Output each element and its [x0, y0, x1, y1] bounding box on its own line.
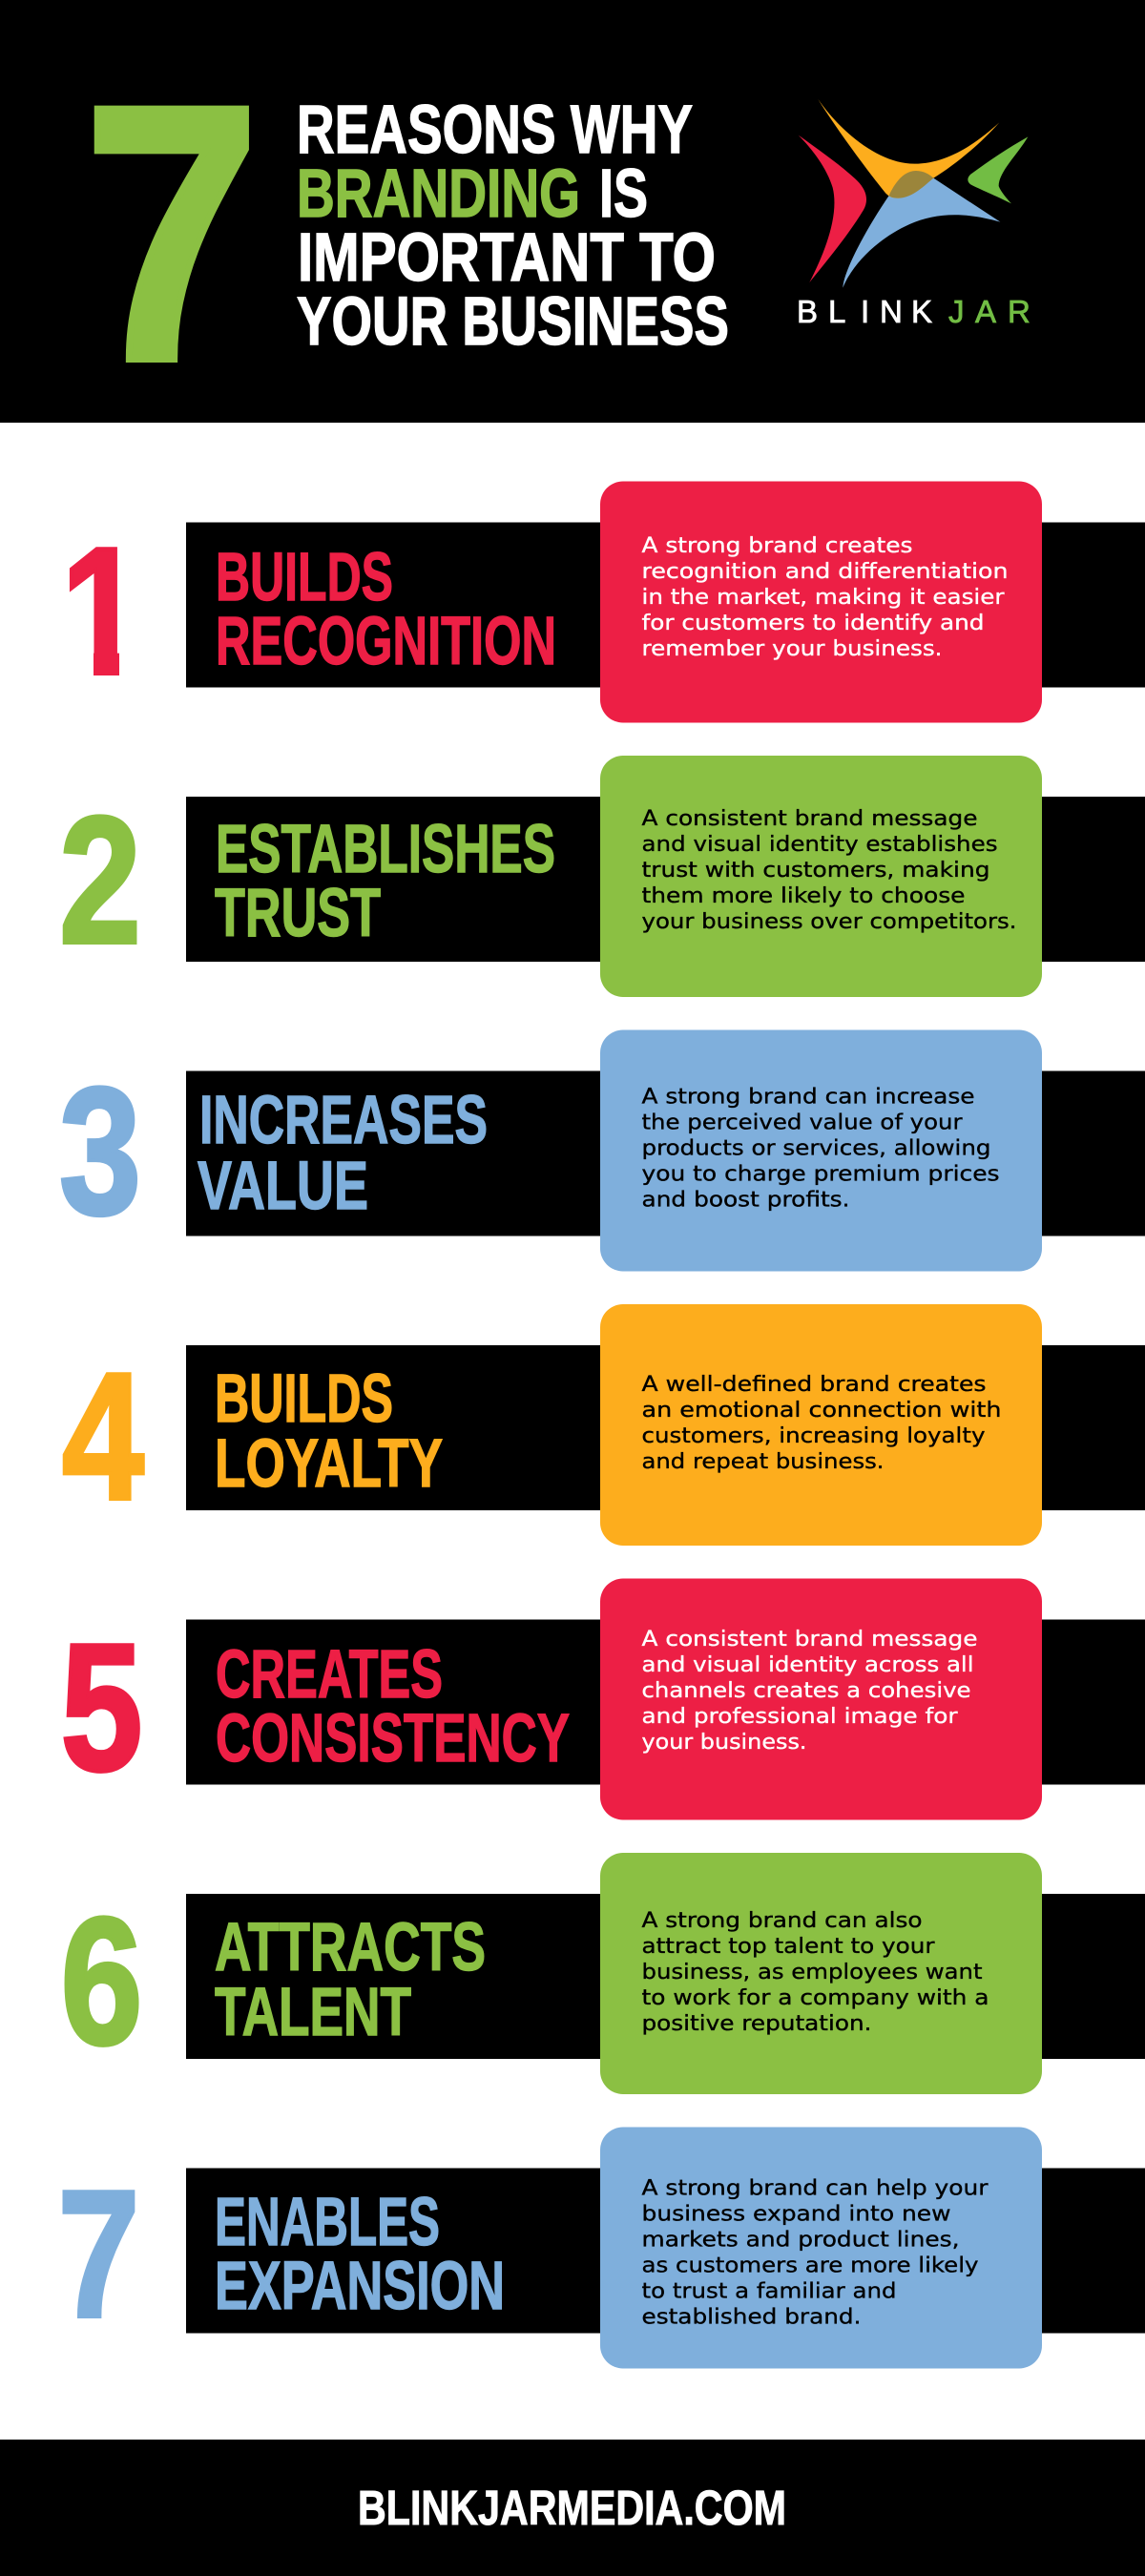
black bar	[186, 1070, 1145, 1236]
card text: trust with customers, making	[641, 859, 990, 883]
card	[600, 1578, 1042, 1820]
card text: A strong brand can help your	[641, 2177, 989, 2200]
row 5: creates consistency	[61, 1578, 1145, 1820]
card text: remember your business.	[641, 637, 943, 661]
card text: A strong brand can also	[641, 1909, 922, 1933]
black bar	[186, 1620, 1145, 1784]
heading	[215, 1361, 443, 1502]
heading: CREATES	[216, 1637, 443, 1713]
card text: an emotional connection with	[641, 1399, 1002, 1423]
card text: A well-defined brand creates	[641, 1373, 987, 1397]
heading: EXPANSION	[215, 2249, 505, 2324]
title	[297, 93, 729, 360]
card text	[641, 1628, 977, 1755]
card text	[641, 807, 1017, 934]
logo wordmark: BLINK	[797, 294, 932, 329]
card text: A consistent brand message	[641, 807, 977, 831]
row 4: builds loyalty	[62, 1304, 1145, 1546]
card text: for customers to identify and	[641, 612, 985, 635]
card text	[641, 1909, 989, 2036]
number 4: 4	[62, 1336, 144, 1538]
card text: established brand.	[641, 2305, 861, 2330]
row 7: enables expansion	[57, 2128, 1145, 2368]
card text: and repeat business.	[641, 1450, 884, 1474]
black bar	[186, 797, 1145, 962]
heading: BUILDS	[215, 1361, 393, 1437]
card	[600, 1304, 1042, 1546]
title: BRANDING	[297, 156, 580, 232]
row 6: attracts talent	[61, 1853, 1145, 2094]
heading: ENABLES	[215, 2185, 440, 2260]
card	[600, 2128, 1042, 2368]
card text: and professional image for	[641, 1705, 959, 1729]
number 6: 6	[61, 1880, 143, 2083]
big number seven: 7	[84, 31, 260, 436]
heading	[216, 1637, 570, 1776]
heading	[215, 1910, 486, 2050]
footer band	[0, 2440, 1145, 2576]
card	[600, 756, 1042, 997]
row 2: establishes trust	[59, 756, 1145, 997]
heading: TRUST	[215, 876, 381, 951]
card text: business expand into new	[641, 2202, 951, 2227]
card text: the perceived value of your	[641, 1111, 964, 1135]
heading	[198, 1083, 488, 1224]
card text: to work for a company with a	[641, 1986, 989, 2010]
card text: A strong brand creates	[641, 534, 912, 558]
logo: Blinkjar	[797, 99, 1030, 329]
logo mark	[799, 99, 1028, 288]
card text: you to charge premium prices	[641, 1162, 1000, 1187]
heading: CONSISTENCY	[216, 1701, 570, 1776]
card	[600, 1030, 1042, 1271]
heading	[215, 2185, 505, 2324]
number 7: 7	[57, 2153, 139, 2356]
card text	[641, 1373, 1002, 1474]
footer URL: BLINKJARMEDIA.COM	[358, 2481, 786, 2535]
card text: to trust a familiar and	[641, 2280, 897, 2303]
number 2: 2	[59, 779, 141, 982]
black bar	[186, 1894, 1145, 2059]
card text: them more likely to choose	[641, 884, 966, 908]
card text: A strong brand can increase	[641, 1086, 975, 1109]
card text: recognition and differentiation	[641, 560, 1008, 584]
number 5: 5	[61, 1607, 143, 1809]
number 1: 1	[61, 510, 143, 713]
logo wordmark: JAR	[948, 294, 1030, 329]
row 1: builds recognition	[61, 481, 1145, 723]
card	[600, 481, 1042, 723]
black bar	[186, 523, 1145, 687]
card text: A consistent brand message	[641, 1628, 977, 1652]
card text: customers, increasing loyalty	[641, 1424, 985, 1448]
heading: BUILDS	[216, 540, 393, 615]
card text: and boost profits.	[641, 1189, 849, 1212]
card text	[641, 1086, 1000, 1212]
card text: products or services, allowing	[641, 1137, 990, 1160]
card text: channels creates a cohesive	[641, 1679, 971, 1703]
header band	[0, 0, 1145, 436]
heading: TALENT	[215, 1975, 411, 2050]
black bar	[186, 1345, 1145, 1510]
title: IMPORTANT TO	[298, 220, 716, 296]
title: IS	[599, 156, 648, 232]
card text: and visual identity across all	[641, 1653, 973, 1677]
black bar	[186, 2168, 1145, 2334]
heading: LOYALTY	[215, 1426, 443, 1502]
card text: attract top talent to your	[641, 1935, 936, 1959]
card text: your business.	[641, 1731, 807, 1755]
number 3: 3	[59, 1050, 141, 1253]
heading: INCREASES	[199, 1083, 488, 1158]
card text: as customers are more likely	[641, 2254, 979, 2278]
card text: your business over competitors.	[641, 910, 1017, 934]
heading: VALUE	[198, 1149, 368, 1224]
card text: markets and product lines,	[641, 2229, 960, 2252]
heading: ATTRACTS	[215, 1910, 486, 1985]
card text: positive reputation.	[641, 2012, 872, 2036]
title: YOUR BUSINESS	[297, 284, 729, 360]
heading: ESTABLISHES	[216, 812, 555, 887]
title: REASONS WHY	[297, 93, 693, 168]
card text	[641, 534, 1008, 661]
card text: and visual identity establishes	[641, 833, 998, 857]
heading: RECOGNITION	[216, 604, 556, 679]
card	[600, 1853, 1042, 2094]
heading	[215, 812, 555, 951]
card text: in the market, making it easier	[641, 586, 1006, 610]
row 3: increases value	[59, 1030, 1145, 1271]
heading	[216, 540, 556, 679]
card text	[641, 2177, 989, 2330]
card text: business, as employees want	[641, 1961, 983, 1984]
